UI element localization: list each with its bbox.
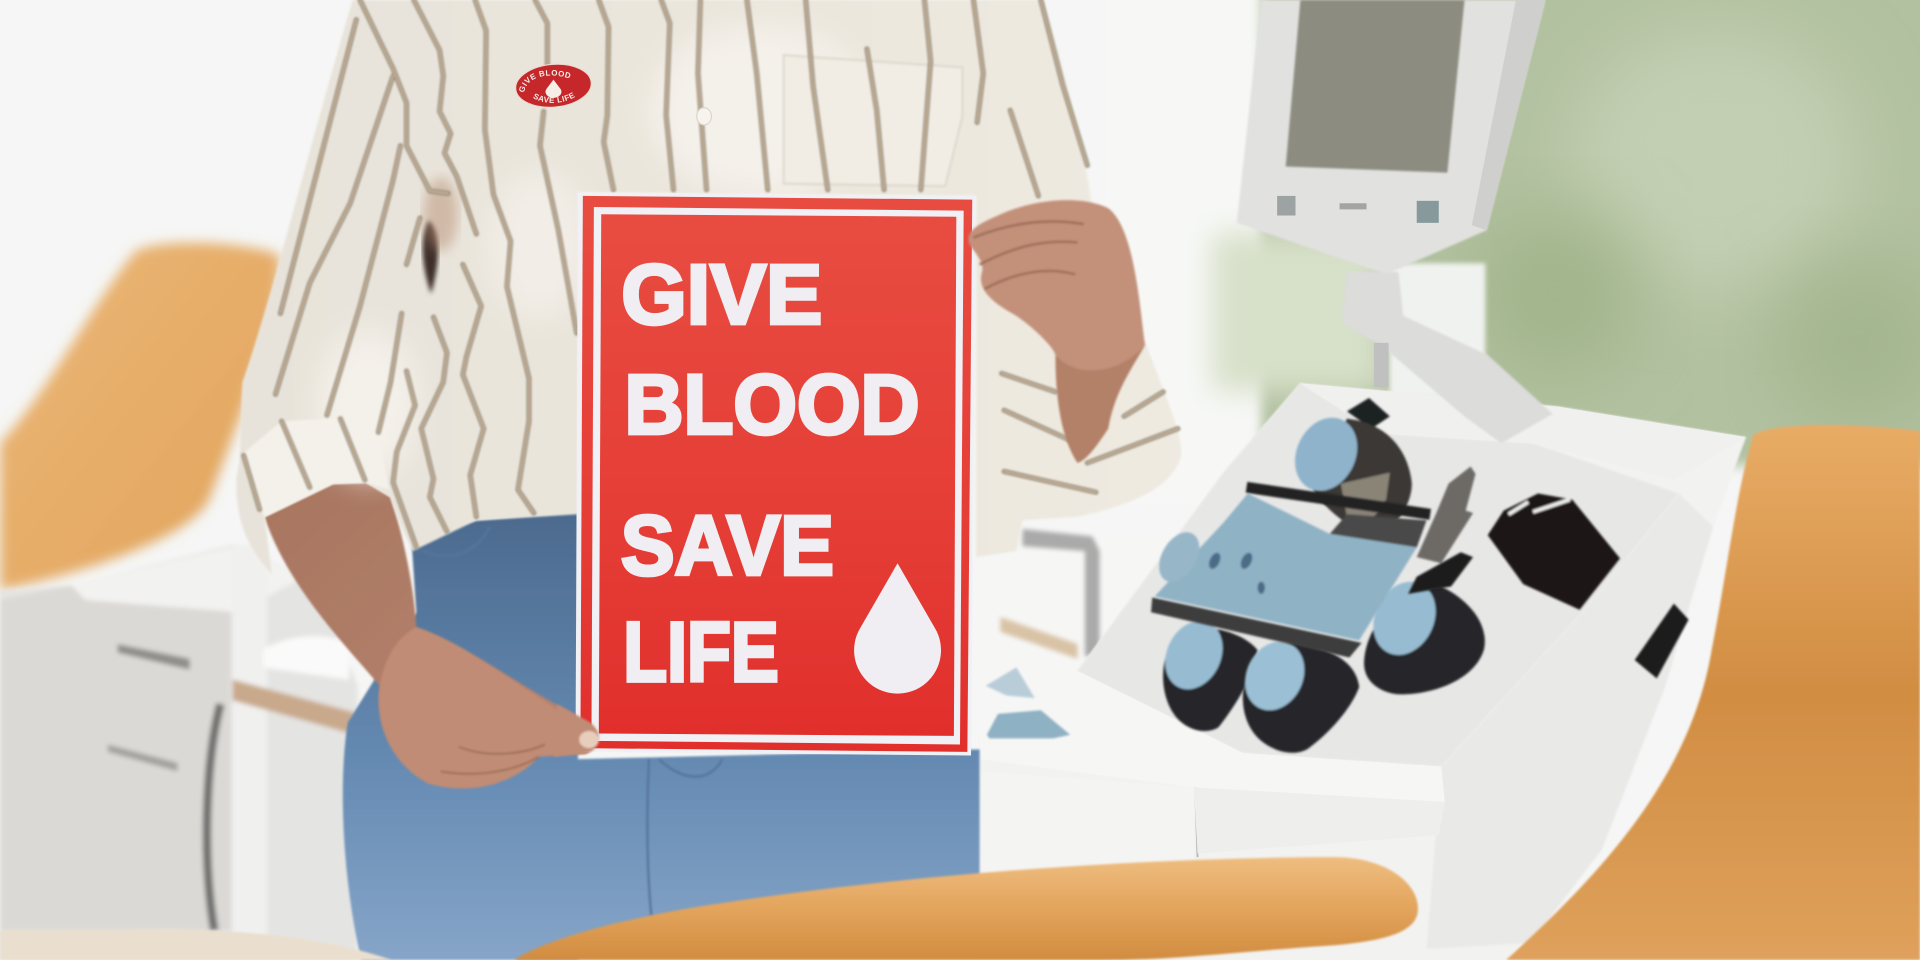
- poster heading: save: SAVE: [621, 498, 834, 592]
- icon: blood drop: [854, 563, 941, 694]
- poster sheet: [576, 192, 976, 756]
- poster red field: [580, 196, 972, 752]
- person: right hand holding the poster: [969, 200, 1145, 463]
- left orange chair, blurred: [0, 243, 280, 590]
- blue pump plate: [1151, 467, 1476, 658]
- left cabinet and table: [0, 545, 358, 960]
- badge: give blood save life sticker: GIVE BLOOD: [519, 70, 570, 92]
- monitor stand: [1342, 272, 1553, 443]
- pocket: [784, 55, 962, 186]
- foreground tan chair edge: [0, 929, 392, 960]
- poster heading: give: GIVE: [621, 247, 822, 341]
- poster heading: life: LIFE: [623, 605, 779, 699]
- right pump roller: [1362, 572, 1485, 694]
- machine sloped control panel: [1078, 383, 1679, 767]
- black sensor block: [1488, 493, 1620, 610]
- person: left fingertip over poster: [553, 704, 599, 757]
- machine body: [980, 383, 1746, 960]
- poster: give blood save life: [576, 192, 976, 756]
- monitor: [1237, 0, 1545, 274]
- shirt stripes: [244, 0, 1178, 547]
- right orange chair: [1506, 425, 1920, 960]
- window with blurred greenery: [1108, 0, 1920, 502]
- top pump roller: [1283, 398, 1412, 536]
- lower middle pump roller: [1234, 632, 1359, 753]
- lower left pump roller: [1154, 612, 1258, 731]
- blood donation machine: [976, 0, 1746, 960]
- poster inner white frame: [591, 207, 964, 744]
- shirt button: [697, 108, 711, 125]
- badge: give blood save life sticker: SAVE LIFE: [533, 92, 575, 103]
- counter behind poster: [976, 539, 1224, 686]
- foreground chair armrest: [514, 857, 1418, 960]
- person: striped shirt: [236, 0, 1182, 574]
- shirt highlights and folds: [318, 331, 416, 478]
- poster heading: blood: BLOOD: [624, 357, 920, 451]
- blue tubing pieces: [986, 667, 1070, 738]
- badge: give blood save life sticker: [515, 64, 592, 108]
- poster inner red panel: [599, 214, 956, 736]
- power switch: [1635, 604, 1689, 678]
- person: left forearm and hand: [264, 482, 596, 788]
- person: jeans: [343, 512, 980, 960]
- armpit shadow: [423, 220, 438, 294]
